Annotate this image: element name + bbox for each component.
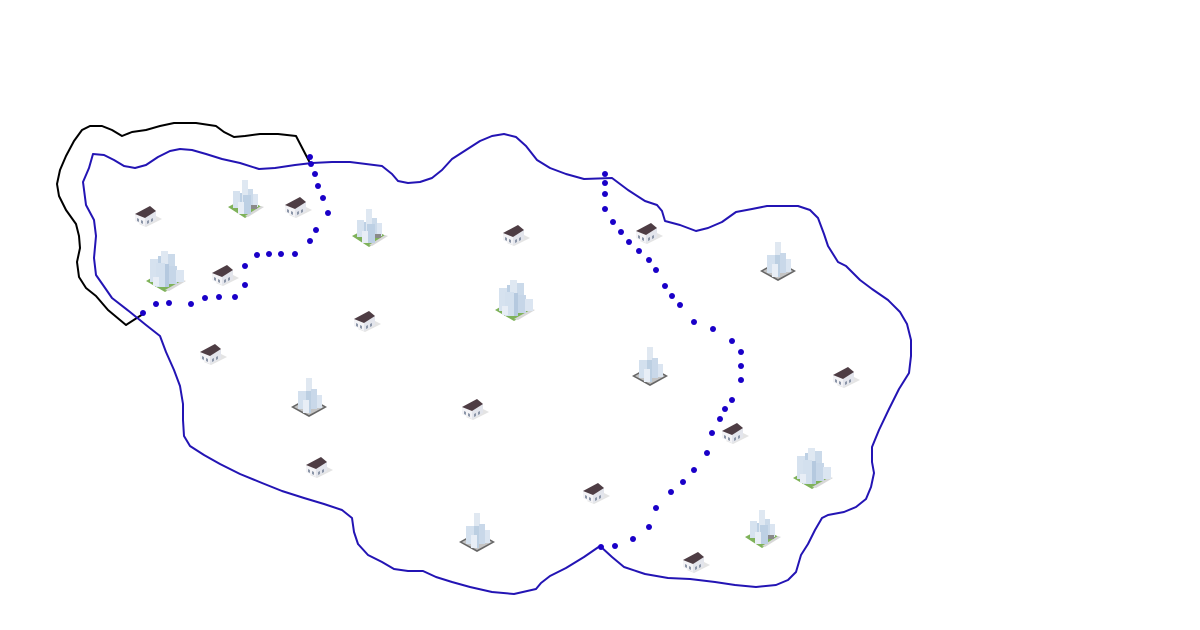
- icons: houses: [135, 197, 860, 573]
- icons: small green-base towers: [228, 180, 781, 548]
- dotted boundary: west: [140, 154, 331, 316]
- icons: grey-base towers: [291, 242, 796, 552]
- outline: blue central and eastern regions: [83, 134, 911, 594]
- icons: large green-base towers: [146, 251, 833, 489]
- dotted boundary: east: [598, 171, 744, 550]
- outline: black western region: [57, 123, 310, 325]
